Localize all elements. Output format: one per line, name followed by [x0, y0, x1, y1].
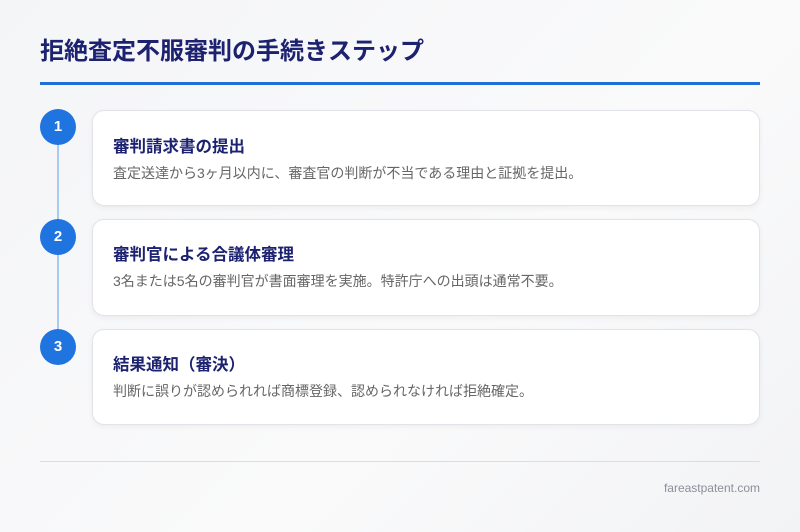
title: 拒絶査定不服審判の手続きステップ	[40, 38, 424, 65]
step 3 heading: 結果通知（審決）	[113, 356, 245, 374]
step 1 number: 1	[54, 118, 62, 135]
card: step 2	[92, 219, 760, 316]
step 1 number	[40, 109, 76, 145]
step 3 number	[40, 329, 76, 365]
footer: fareastpatent.com	[664, 481, 760, 495]
step 1 text: 査定送達から3ヶ月以内に、審査官の判断が不当である理由と証拠を提出。	[113, 165, 582, 181]
step 2 number: 2	[54, 228, 62, 245]
card: step 1	[92, 110, 760, 206]
timeline line	[57, 130, 59, 350]
step 1 heading: 審判請求書の提出	[113, 138, 245, 156]
step 2 number	[40, 219, 76, 255]
step 2 heading: 審判官による合議体審理	[113, 246, 294, 264]
step 3 number: 3	[54, 338, 62, 355]
card: step 3	[92, 329, 760, 425]
step 2 text: 3名または5名の審判官が書面審理を実施。特許庁への出頭は通常不要。	[113, 273, 563, 289]
step 3 text: 判断に誤りが認められれば商標登録、認められなければ拒絶確定。	[113, 383, 533, 399]
